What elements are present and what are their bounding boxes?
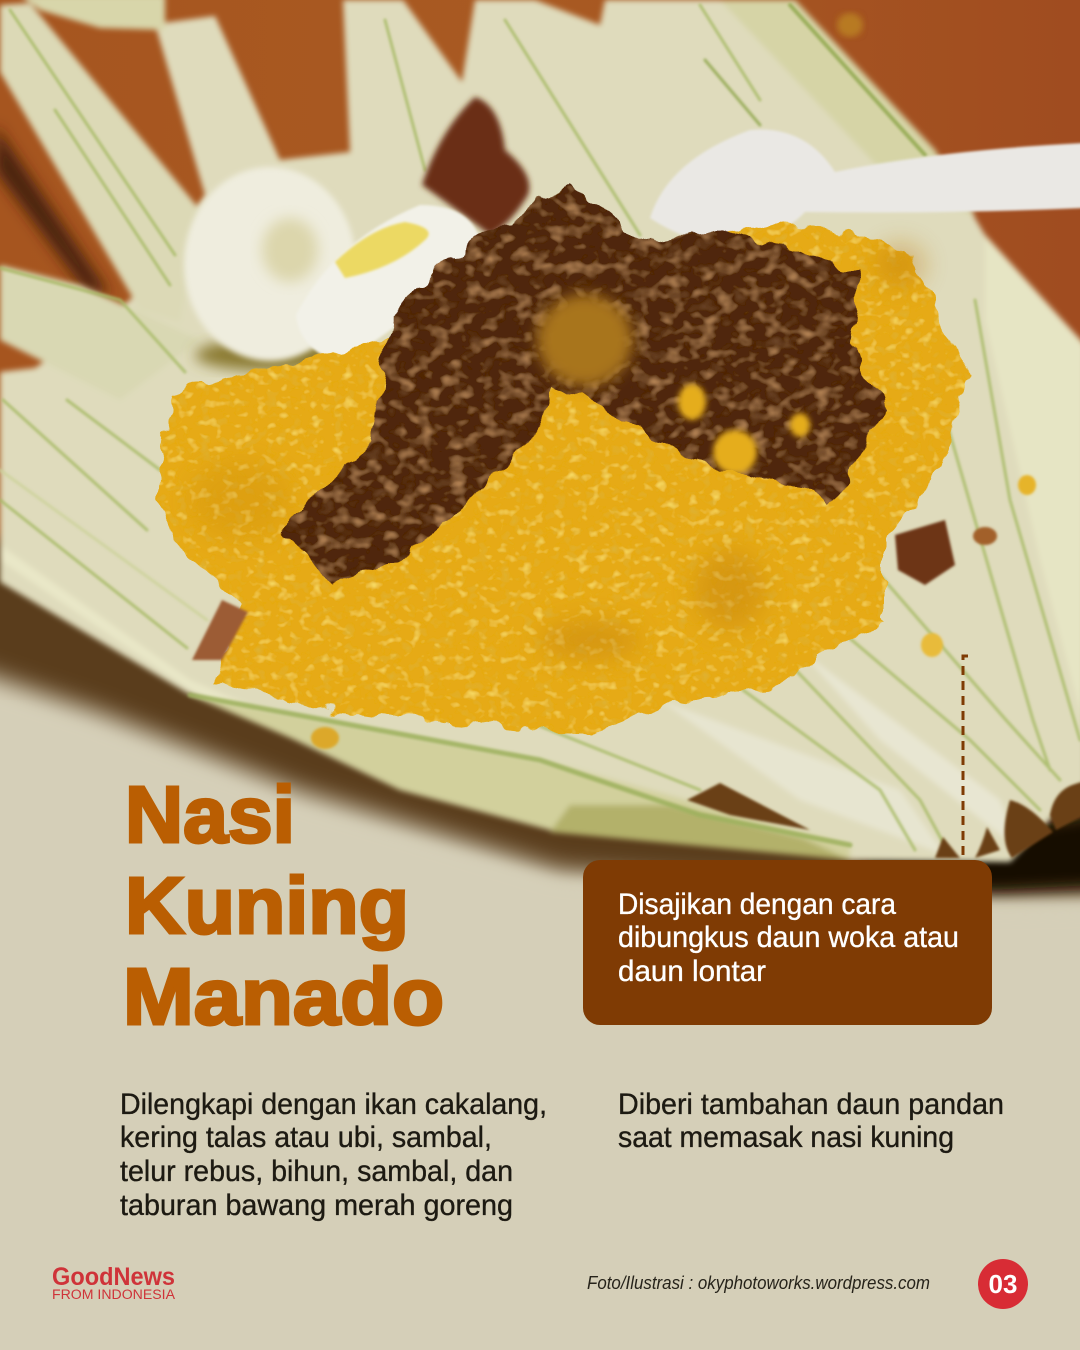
- leaf tips and gaps: [687, 782, 1080, 858]
- text block: accompaniments: [120, 1088, 547, 1222]
- text block: pandan leaf: [618, 1088, 1004, 1154]
- page number badge: [978, 1259, 1028, 1309]
- dark shadow at right edge: [860, 815, 1080, 890]
- title: Nasi: [125, 770, 295, 859]
- beige page background fading over the table: [0, 665, 1080, 1350]
- text block: accompaniments: taburan bawang merah goreng: [120, 1189, 513, 1222]
- dark crease on table: [0, 125, 110, 295]
- logo: GoodNews from Indonesia: GoodNews: [52, 1263, 175, 1291]
- wooden table: [0, 0, 1080, 700]
- yellow rice: [160, 222, 968, 735]
- text block: pandan leaf: saat memasak nasi kuning: [618, 1121, 954, 1154]
- text block: accompaniments: Dilengkapi dengan ikan cakalang,: [120, 1088, 547, 1121]
- callout: serving: Disajikan dengan cara: [618, 888, 896, 921]
- callout: serving: dibungkus daun woka atau: [618, 921, 959, 954]
- shredded fish topping: [284, 185, 885, 585]
- boiled egg: [184, 167, 480, 371]
- text block: accompaniments: kering talas atau ubi, sambal,: [120, 1121, 492, 1154]
- shaded folds in rice: [190, 243, 925, 660]
- loose topping pieces: [192, 13, 1036, 749]
- leaf ribs: [0, 5, 1080, 855]
- text block: pandan leaf: Diberi tambahan daun pandan: [618, 1088, 1004, 1121]
- rice spots among topping: [678, 384, 810, 474]
- callout: serving: daun lontar: [618, 955, 766, 988]
- photo credit: Foto/Ilustrasi : okyphotoworks.wordpress.com: [587, 1273, 930, 1293]
- leaf main body: [0, 0, 1080, 862]
- sambal: [422, 97, 529, 235]
- golden patch in topping: [537, 294, 633, 386]
- title: Kuning: [125, 861, 409, 950]
- table shadow under leaf: [0, 540, 1080, 900]
- title: Manado: [123, 952, 444, 1041]
- text block: accompaniments: telur rebus, bihun, sambal, dan: [120, 1155, 513, 1188]
- logo: GoodNews from Indonesia: [52, 1263, 175, 1302]
- title: [123, 770, 444, 1041]
- plastic spoon: [650, 130, 1080, 245]
- dashed connector: [963, 656, 968, 860]
- logo: GoodNews from Indonesia: FROM INDONESIA: [52, 1287, 175, 1302]
- page number badge: 03: [989, 1269, 1017, 1299]
- callout: serving: [583, 860, 992, 1025]
- palm leaf fan: [0, 0, 1080, 862]
